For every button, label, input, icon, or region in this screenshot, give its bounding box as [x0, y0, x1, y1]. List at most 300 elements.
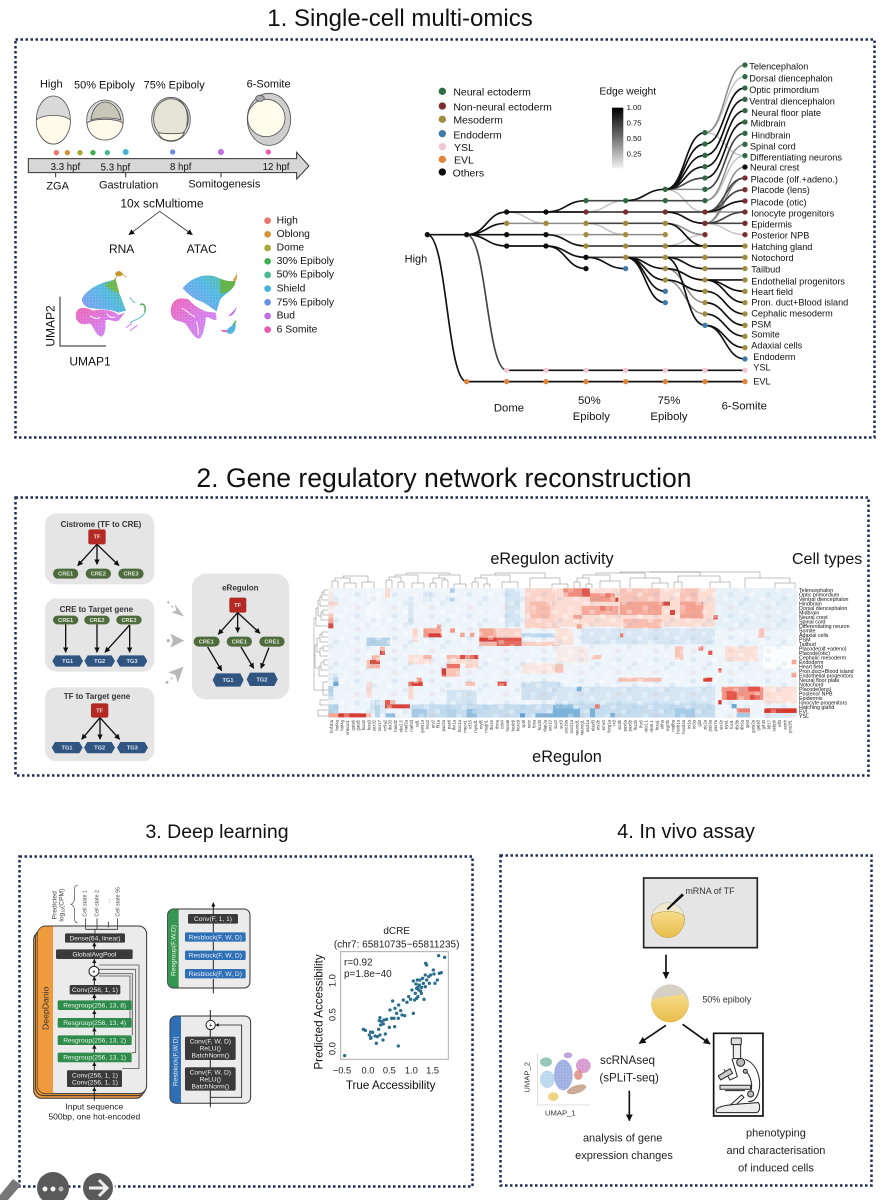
card: CRE to target gene: CRE3	[121, 618, 137, 624]
output labels: 10	[61, 907, 66, 913]
resgroup detail card	[168, 903, 250, 993]
lineage legend	[439, 87, 552, 179]
stage axis labels: 50%	[578, 395, 601, 407]
resgroup layers: Resgroup(256, 13, 4)	[63, 1020, 126, 1027]
phenotyping label: phenotyping	[746, 1128, 806, 1140]
axis titles: Predicted Accessibility	[313, 954, 326, 1070]
heatmap background	[328, 588, 797, 718]
small UMAP plot: UMAP_1	[545, 1108, 576, 1117]
phenotyping label: and characterisation	[727, 1145, 825, 1157]
in vivo assay workflow	[522, 878, 825, 1174]
branch arrows	[639, 1024, 710, 1044]
scatter points	[343, 954, 446, 1057]
heatmap column labels: neurog1	[580, 719, 585, 735]
UMAP axes	[60, 297, 106, 346]
scRNAseq label: scRNAseq	[600, 1054, 655, 1067]
timeline arrow	[28, 152, 309, 179]
heatmap row labels: Adaxial cells	[799, 633, 829, 639]
heatmap row labels: Placode(lens)	[799, 687, 832, 693]
card: cistrome: CRE1	[58, 571, 73, 577]
heatmap column labels: sox32	[372, 719, 377, 731]
heatmap column labels: foxg1a	[606, 719, 611, 733]
black nodes	[425, 165, 747, 271]
heatmap column labels: hnf4g	[340, 719, 345, 730]
heatmap column labels: sox19a	[564, 719, 569, 734]
arrow to embryo	[663, 955, 668, 978]
heatmap column labels: zic2a	[702, 719, 707, 730]
heatmap row labels	[799, 588, 854, 720]
heatmap row labels: Dorsal diencephalon	[799, 606, 847, 612]
heatmap left half cells	[328, 588, 560, 717]
card: TF to target gene: TF	[96, 708, 104, 714]
heatmap row labels: Endoderm	[799, 660, 824, 666]
scRNAseq label: (sPLiT-seq)	[599, 1072, 659, 1085]
heatmap row labels: Midbrain	[799, 610, 819, 616]
heatmap column labels: etv2	[430, 719, 435, 728]
card: eRegulon: TG1	[222, 678, 233, 684]
terminal cell type labels: Optic primordium	[749, 85, 819, 95]
edge weight colour bar: 1.00	[627, 103, 642, 112]
heatmap column labels: pax2a	[441, 719, 446, 731]
resgroup layers	[58, 1000, 132, 1062]
timeline labels: 5.3 hpf	[101, 163, 131, 174]
card: eRegulon: CRE1	[264, 639, 280, 645]
heatmap column labels: emx2	[601, 719, 606, 730]
black edges	[427, 88, 745, 382]
card: CRE to target gene: CRE2	[89, 618, 105, 624]
heatmap column labels: dlx5a	[740, 719, 745, 730]
developmental processes: Somitogenesis	[188, 179, 261, 191]
heatmap column labels: tal1	[414, 719, 419, 727]
modality labels: ATAC	[187, 242, 217, 256]
DeepDanio architecture diagram	[34, 885, 251, 1122]
stage labels: 50% Epiboly	[74, 79, 136, 91]
axis titles: True Accessibility	[346, 1079, 436, 1092]
resgroup detail card: Resblock(F, W, D)	[189, 971, 242, 978]
heatmap row labels: Spinal cord	[799, 620, 826, 626]
card: eRegulon: CRE1	[232, 639, 247, 645]
heatmap column labels: foxa	[532, 719, 537, 728]
skip connections	[99, 965, 139, 1069]
stage legend: Shield	[277, 284, 306, 295]
axis tick labels: −0.5	[333, 1066, 351, 1076]
analysis label: expression changes	[575, 1150, 673, 1162]
timeline ticks	[56, 173, 221, 177]
stage labels: 75% Epiboly	[144, 79, 205, 91]
heatmap column labels: pax3a	[708, 719, 713, 731]
timeline labels: 3.3 hpf	[51, 162, 81, 173]
heatmap column labels: egr2b	[665, 719, 670, 731]
heatmap column labels: pou3f1	[788, 719, 793, 733]
heatmap column labels: shha	[660, 719, 665, 729]
stage legend: 50% Epiboly	[277, 270, 335, 281]
terminal cell type labels: Placode (otic)	[751, 197, 807, 207]
output labels: Cell state 95	[116, 887, 122, 917]
terminal cell type labels: Adaxial cells	[751, 340, 803, 350]
heatmap column labels: pax6a	[622, 719, 627, 731]
card: eRegulon: TG2	[256, 677, 267, 683]
conv layer: Conv(256, 1, 1)	[72, 987, 118, 994]
arrow to analysis	[627, 1091, 632, 1121]
terminal cell type labels: Hindbrain	[751, 131, 791, 141]
terminal cell type labels: Hatching gland	[751, 242, 812, 252]
heatmap column labels: gata2a	[750, 719, 755, 733]
panel: in vivo assay	[500, 856, 872, 1186]
input caption	[48, 1102, 140, 1122]
medium edges	[507, 65, 745, 314]
output arrows	[86, 918, 118, 933]
panel: single-cell multi-omics	[16, 40, 874, 438]
heatmap row labels: Placode(olf.+adeno)	[799, 646, 847, 652]
lineage legend: EVL	[454, 156, 474, 167]
card: cistrome: CRE3	[123, 571, 139, 577]
root label: High	[405, 254, 427, 266]
axis tick labels: 0.5	[328, 1008, 338, 1021]
output labels: Cell state 1	[82, 890, 88, 917]
output labels: Cell state 2	[94, 890, 100, 917]
terminal cell type labels: Somite	[751, 330, 780, 340]
axis titles	[313, 954, 436, 1092]
microscope icon	[714, 1033, 763, 1116]
title: section 4: 4. In vivo assay	[617, 821, 755, 843]
heatmap column labels: eya1	[724, 719, 729, 729]
axis tick labels: 0.0	[328, 1042, 338, 1055]
heatmap row labels: Notochord	[799, 682, 823, 688]
terminal cell type labels: Endothelial progenitors	[751, 276, 845, 286]
stage axis labels: Epiboly	[650, 411, 688, 423]
heatmap column labels: onecut1	[345, 719, 350, 735]
terminal cell type labels: Differentiating neurons	[750, 152, 842, 162]
card: TF to target gene: TG1	[61, 746, 73, 752]
heatmap column labels: lhx2b	[633, 719, 638, 730]
global pool layer	[56, 949, 133, 959]
lineage legend: Neural ectoderm	[453, 87, 531, 98]
heatmap column labels: gata3	[756, 719, 761, 730]
heatmap column labels: tbxta	[494, 719, 499, 729]
heatmap heading: eRegulon activity	[490, 550, 615, 568]
heatmap column labels: mef2d	[409, 719, 414, 732]
heatmap column labels: pax7a	[713, 719, 718, 731]
annotation: p=1.8e−40	[344, 969, 392, 980]
heatmap column labels: esrrb	[782, 719, 787, 730]
terminal cell type labels: Placode (olf.+adeno.)	[751, 175, 838, 185]
heatmap row labels: Epidermis	[799, 696, 823, 702]
resblock detail card: +	[209, 1023, 212, 1029]
terminal cell type labels: Posterior NPB	[751, 230, 809, 240]
heatmap row labels: Posterior NPB	[799, 692, 833, 698]
heatmap row labels: Pron.duct+Blood island	[799, 669, 854, 675]
heatmap column labels: tbx16	[489, 719, 494, 730]
column dendrogram	[332, 572, 795, 588]
resblock detail card: ReLU()	[200, 1046, 221, 1053]
heatmap column labels: hoxa9	[505, 719, 510, 731]
terminal cell type labels: Cephalic mesoderm	[751, 309, 833, 319]
terminal cell type labels: Midbrain	[751, 119, 786, 129]
heatmap column labels: foxa2	[361, 719, 366, 730]
lineage legend: Endoderm	[453, 130, 502, 141]
heatmap row labels: Telencephalon	[799, 588, 833, 594]
flow arrows	[93, 943, 96, 1101]
heatmap row labels: Ventral diencephalon	[799, 597, 849, 603]
card: TF to target gene: TG3	[127, 746, 138, 752]
card: eRegulon: CRE1	[199, 639, 214, 645]
heatmap column labels: myod1	[473, 719, 478, 733]
heatmap column labels: irx1a	[686, 719, 691, 729]
neural ectoderm nodes	[584, 63, 747, 203]
model name: DeepDanio	[41, 986, 51, 1030]
resblock detail card: BatchNorm()	[191, 1083, 229, 1090]
split arrows	[129, 211, 192, 235]
cell types heading: Cell types	[792, 551, 862, 568]
dense layer	[65, 933, 125, 943]
lineage tree chart	[405, 62, 848, 423]
card: cistrome	[45, 513, 154, 584]
UMAP plots	[44, 271, 237, 368]
input conv layers: Conv(256, 1, 1)	[72, 1072, 118, 1079]
heatmap column labels: nkx6.1	[649, 719, 654, 732]
card: CRE to target gene: TG2	[94, 659, 105, 665]
card: CRE to target gene: TG1	[62, 659, 73, 665]
heatmap column labels: foxc1a	[457, 719, 462, 732]
edge weight colour bar: Edge weight	[599, 87, 656, 98]
heatmap row labels: YSL	[799, 714, 809, 720]
heatmap column labels: foxi1	[729, 719, 734, 729]
input caption: Input sequence	[65, 1102, 124, 1112]
terminal cell type labels: Ventral diencephalon	[749, 97, 835, 107]
heatmap column labels: ascl1a	[585, 719, 590, 732]
phenotyping label: of induced cells	[738, 1162, 814, 1174]
endoderm nodes	[623, 266, 747, 361]
card: TF to target gene: TG2	[94, 746, 105, 752]
axis tick labels: 0.5	[383, 1066, 396, 1076]
edge weight colour bar	[599, 87, 656, 168]
heatmap column labels: pax8	[446, 719, 451, 729]
row dendrogram	[314, 590, 328, 716]
mesoderm nodes	[504, 221, 747, 350]
heatmap column labels: tfap2a	[542, 719, 547, 732]
card: eRegulon: eRegulon	[222, 583, 259, 592]
dense layer: Dense(64, linear)	[69, 935, 121, 942]
terminal cell type labels: Ionocyte progenitors	[751, 209, 835, 219]
axis tick labels: 1.5	[426, 1066, 439, 1076]
stage labels	[40, 78, 291, 91]
heatmap column labels: gata6	[350, 719, 355, 730]
edge weight colour bar: 0.50	[627, 134, 642, 143]
eRegulon schematic	[45, 513, 289, 761]
stage legend	[264, 216, 335, 335]
developmental processes: Gastrulation	[99, 179, 158, 191]
card: CRE to target gene: TG3	[126, 659, 137, 665]
sum node	[89, 966, 99, 976]
heatmap column labels: gata1a	[420, 719, 425, 733]
heatmap row labels: Differentiating neuron	[799, 624, 850, 630]
card: TF to target gene: TF to Target gene	[64, 692, 131, 701]
heatmap column labels: gli3	[697, 719, 702, 727]
resgroup detail card: Resgroup(F,W,D)	[171, 925, 178, 976]
terminal cell type labels: YSL	[753, 363, 771, 373]
output labels: Predicted	[51, 891, 58, 919]
injection box	[644, 878, 757, 948]
heatmap row labels: Somite	[799, 628, 816, 634]
lineage legend: Mesoderm	[453, 115, 503, 126]
heatmap column labels: tcf15	[468, 719, 473, 729]
heatmap column labels: mef2a	[404, 719, 409, 732]
next button	[81, 1171, 115, 1200]
terminal cell type labels: Notochord	[751, 253, 794, 263]
embryo: 6-somite	[247, 93, 291, 145]
resblock detail card	[170, 1010, 251, 1107]
stage legend: 30% Epiboly	[277, 256, 335, 267]
heatmap column labels: lmo2	[425, 719, 430, 729]
output labels	[51, 887, 122, 922]
terminal cell type labels: Telencephalon	[749, 62, 808, 72]
edge weight colour bar: 0.25	[627, 150, 642, 159]
stage axis labels: Epiboly	[573, 411, 610, 423]
analysis label	[575, 1133, 673, 1162]
resgroup detail card: Resblock(F, W, D)	[189, 934, 242, 941]
card: CRE to target gene: CRE to Target gene	[60, 605, 134, 614]
heatmap column labels: dlx3b	[734, 719, 739, 730]
heatmap column labels: cdx4	[500, 719, 505, 729]
conv layer	[70, 985, 120, 994]
non-neural ectoderm nodes	[584, 176, 747, 237]
card: cistrome: TF	[94, 535, 101, 541]
resblock detail card: ReLU()	[200, 1076, 221, 1083]
heatmap column labels: sox10	[548, 719, 553, 731]
heatmap column labels: elavl3	[590, 719, 595, 731]
global pool layer: GlobalAvgPool	[72, 951, 117, 958]
heatmap column labels: foxa1	[654, 719, 659, 730]
heatmap column labels: hoxc9	[516, 719, 521, 731]
card: cistrome: CRE2	[91, 571, 106, 577]
heatmap right half cells	[555, 588, 797, 717]
light edges	[507, 77, 745, 246]
stage legend: High	[277, 216, 298, 227]
epiboly label: 50% epiboly	[702, 995, 752, 1005]
heatmap column labels: sox3	[558, 719, 563, 729]
title: section 2: 2. Gene regulatory network reconstruction	[196, 463, 692, 493]
developmental processes	[46, 179, 261, 193]
stage axis labels: Dome	[494, 402, 524, 414]
input caption: 500bp, one hot-encoded	[48, 1112, 140, 1122]
pencil button	[0, 1179, 21, 1200]
UMAP axis labels	[44, 305, 111, 368]
heatmap row labels: Tailbud	[799, 642, 816, 648]
dark edges	[467, 133, 745, 370]
card: eRegulon	[192, 574, 289, 699]
terminal cell type labels: Tailbud	[751, 265, 780, 275]
heatmap column labels: foxa3	[366, 719, 371, 730]
heatmap column labels: fli1a	[436, 719, 441, 728]
output labels: (CPM)	[59, 889, 66, 908]
heatmap row labels: Hatching gland	[799, 705, 834, 711]
stage legend: Oblong	[277, 229, 310, 240]
heatmap row labels: Hindbrain	[799, 602, 822, 608]
heatmap	[328, 588, 797, 718]
stage legend: Dome	[277, 242, 304, 253]
resgroup layers: Resgroup(256, 13, 2)	[63, 1037, 126, 1044]
heatmap column labels: otx2b	[596, 719, 601, 730]
timeline labels	[51, 162, 290, 174]
resblock detail card: Resblock(F,W,D)	[173, 1036, 180, 1086]
input conv layers	[67, 1070, 122, 1087]
heatmap row labels: EVL	[799, 710, 809, 716]
card: eRegulon: TF	[234, 603, 242, 609]
10x scMultiome heading: 10x scMultiome	[120, 197, 204, 211]
gray flow arrows	[165, 601, 184, 684]
heatmap column labels: hnf4a	[334, 719, 339, 730]
resblock detail card: Conv(F, W, D)	[190, 1069, 231, 1076]
heatmap column labels: lhx5	[638, 719, 643, 728]
modality labels	[109, 242, 217, 256]
heatmap row labels: Heart field	[799, 664, 823, 670]
UMAP axis labels: UMAP1	[69, 354, 111, 368]
small UMAP plot	[522, 1052, 591, 1117]
heatmap column labels: mafba	[670, 719, 675, 732]
heatmap row labels: PSM	[799, 638, 810, 644]
sum node: +	[92, 969, 96, 975]
EVL nodes	[464, 379, 747, 384]
heatmap column labels: meox1	[462, 719, 467, 733]
developmental processes: ZGA	[46, 181, 70, 193]
embryo at 50% epiboly	[651, 984, 689, 1022]
heatmap column labels: hoxb1a	[676, 719, 681, 734]
phenotyping label	[727, 1128, 825, 1174]
output brace	[71, 885, 78, 923]
axis tick labels	[328, 974, 439, 1076]
heatmap column labels	[329, 719, 793, 735]
heatmap column labels: hnf1ba	[329, 719, 334, 733]
input conv layers: Conv(256, 1, 1)	[72, 1079, 118, 1086]
card: cistrome: Cistrome (TF to CRE)	[61, 520, 142, 529]
terminal cell type labels: Endoderm	[753, 352, 796, 362]
timeline dots	[54, 149, 271, 155]
terminal cell type labels: Epidermis	[751, 219, 792, 229]
timeline and embryo stages	[28, 78, 309, 256]
heatmap column labels: grhl3	[761, 719, 766, 729]
heatmap column labels: neurod1	[574, 719, 579, 735]
scRNAseq label	[599, 1054, 659, 1085]
heatmap column labels: lhx1a	[452, 719, 457, 730]
heatmap column labels: sox21a	[569, 719, 574, 734]
title: section 3: 3. Deep learning	[145, 821, 289, 843]
x axis label: eRegulon: eRegulon	[532, 748, 602, 766]
heatmap column labels: six1b	[718, 719, 723, 730]
stage axis labels	[494, 395, 767, 423]
axis tick labels: 1.0	[405, 1066, 418, 1076]
embryo: 75% epiboly	[152, 97, 190, 141]
resgroup detail card: Conv(F, 1, 1)	[194, 916, 232, 923]
heatmap column labels: elf3	[777, 719, 782, 727]
heatmap row labels: Placode(otic)	[799, 651, 830, 657]
terminal cell type labels: Spinal cord	[750, 142, 796, 152]
terminal cell type labels: Neural crest	[750, 163, 800, 173]
model card stack	[34, 926, 147, 1098]
plot frame	[341, 952, 448, 1059]
terminal cell type labels: Neural floor plate	[751, 108, 821, 118]
stage axis labels: 75%	[658, 395, 680, 407]
output labels: ...	[106, 899, 112, 903]
embryo: 50% epiboly	[87, 100, 123, 140]
heatmap column labels: msgn1	[484, 719, 489, 733]
heatmap column labels: cebpb	[772, 719, 777, 731]
embryo: high	[36, 96, 70, 144]
heatmap column labels: sox17	[377, 719, 382, 731]
panel: deep learning	[20, 856, 472, 1186]
output labels: log	[59, 913, 66, 922]
resgroup detail card: Resblock(F, W, D)	[189, 953, 242, 960]
heatmap column labels: nkx2.1	[644, 719, 649, 732]
